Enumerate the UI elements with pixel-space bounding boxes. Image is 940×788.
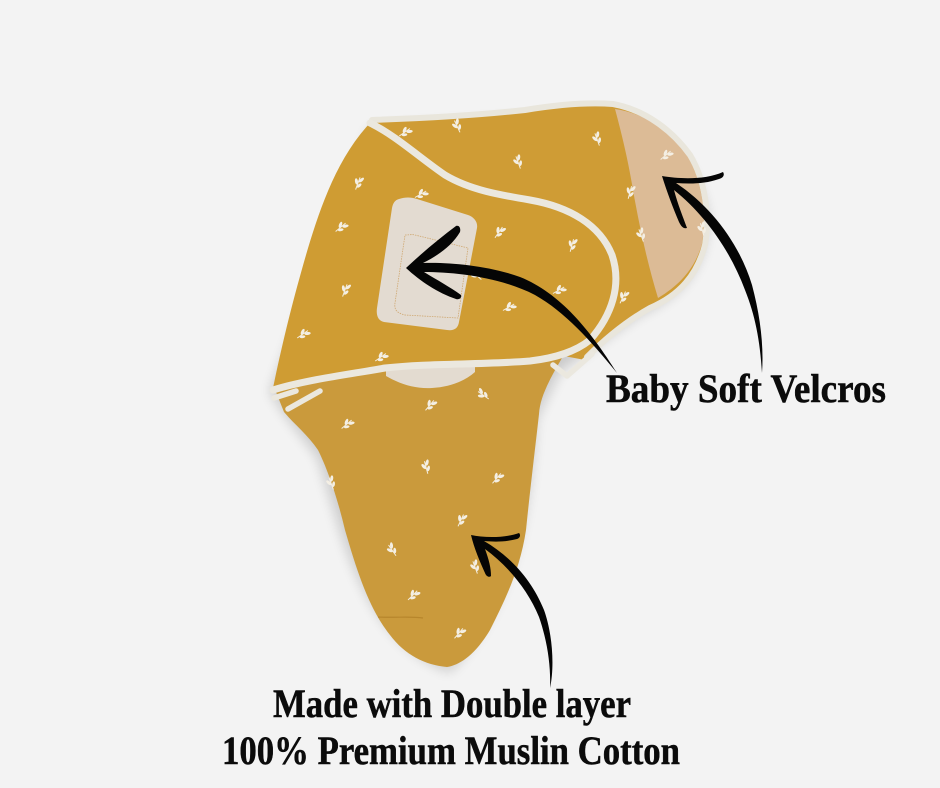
leaf prints: back flap xyxy=(396,117,709,305)
underside patch xyxy=(386,364,475,388)
crossing tie bindings xyxy=(274,354,592,409)
label: Baby Soft Velcros: Baby Soft Velcros xyxy=(606,366,886,411)
fold crease xyxy=(378,617,423,618)
front wrap flap xyxy=(273,123,616,409)
label: 100% Premium Muslin Cotton: 100% Premium Muslin Cotton xyxy=(222,728,680,773)
arrow: to muslin fabric xyxy=(471,533,552,688)
velcro strip: tan landing pad xyxy=(615,109,704,298)
arrow: to front velcro patch xyxy=(406,226,617,373)
flap binding xyxy=(372,103,707,357)
soft shadow xyxy=(270,112,708,672)
label: Made with Double layer: Made with Double layer xyxy=(273,681,631,726)
flap binding xyxy=(273,123,616,390)
arrow: to back velcro xyxy=(662,172,763,373)
back wrap flap xyxy=(372,103,709,360)
leaf prints: lower panel xyxy=(324,387,506,642)
velcro patch xyxy=(377,198,477,330)
swaddle product xyxy=(270,103,709,672)
leaf prints: front flap xyxy=(294,174,579,365)
lower body panel xyxy=(276,358,562,667)
